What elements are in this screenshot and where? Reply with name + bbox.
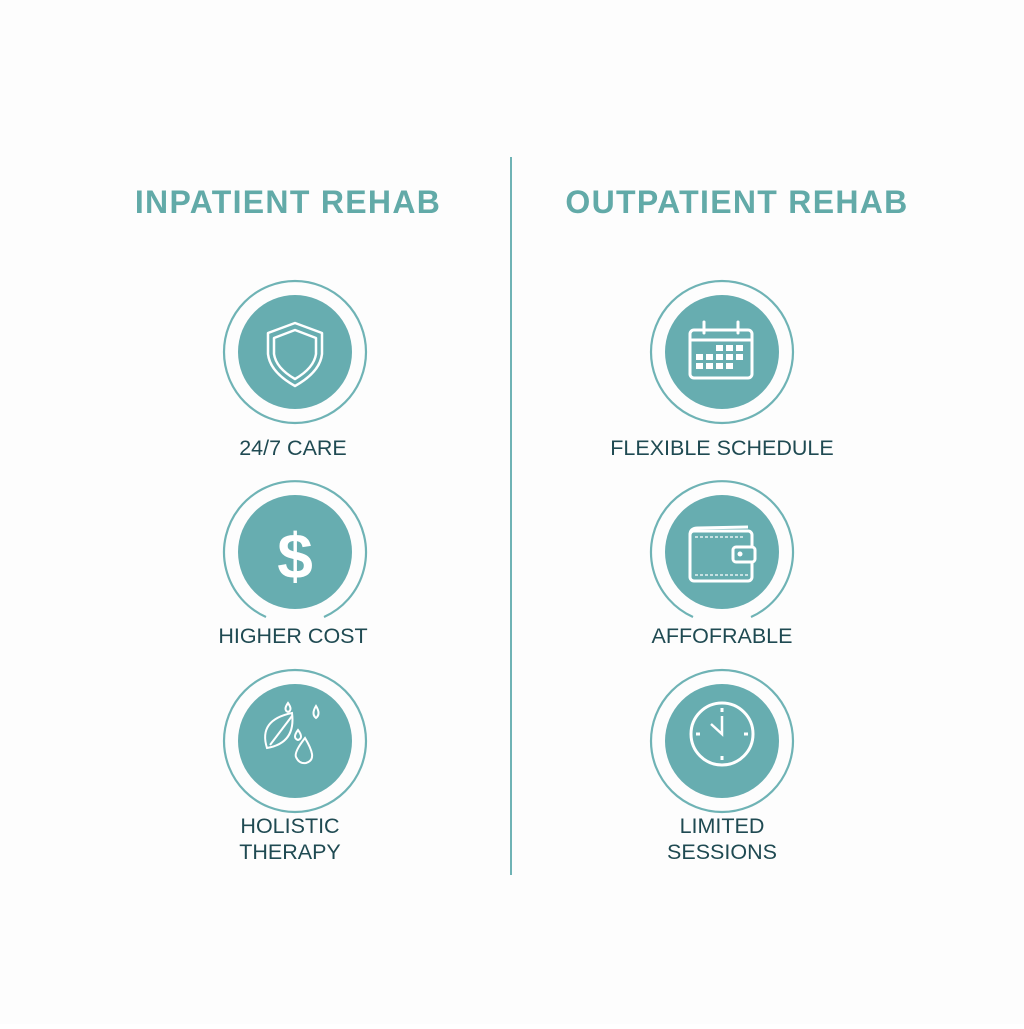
icon: dollar: $ bbox=[277, 520, 313, 592]
icon: clock bbox=[691, 703, 753, 765]
heading: outpatient: OUTPATIENT REHAB bbox=[565, 184, 909, 220]
item: 24/7 care bbox=[224, 281, 366, 460]
item: 24/7 care: 24/7 CARE bbox=[239, 436, 347, 460]
item: limited sessions: SESSIONS bbox=[667, 840, 777, 864]
item: higher cost: HIGHER COST bbox=[218, 624, 368, 648]
item: affordable: AFFOFRABLE bbox=[652, 624, 792, 648]
item: affordable bbox=[651, 481, 793, 648]
item: limited sessions bbox=[651, 670, 793, 864]
icon: calendar bbox=[690, 322, 752, 378]
icon: wallet bbox=[690, 527, 755, 581]
icon: shield bbox=[268, 323, 322, 386]
item: holistic therapy: HOLISTIC bbox=[240, 814, 340, 838]
item: holistic therapy: THERAPY bbox=[239, 840, 341, 864]
icon: leaf and drops bbox=[265, 703, 318, 763]
divider bbox=[510, 157, 512, 875]
item: flexible schedule: FLEXIBLE SCHEDULE bbox=[610, 436, 834, 460]
item: higher cost bbox=[218, 481, 368, 648]
heading: inpatient: INPATIENT REHAB bbox=[135, 184, 441, 220]
item: holistic therapy bbox=[224, 670, 366, 864]
item: limited sessions: LIMITED bbox=[680, 814, 764, 838]
item: flexible schedule bbox=[610, 281, 834, 460]
